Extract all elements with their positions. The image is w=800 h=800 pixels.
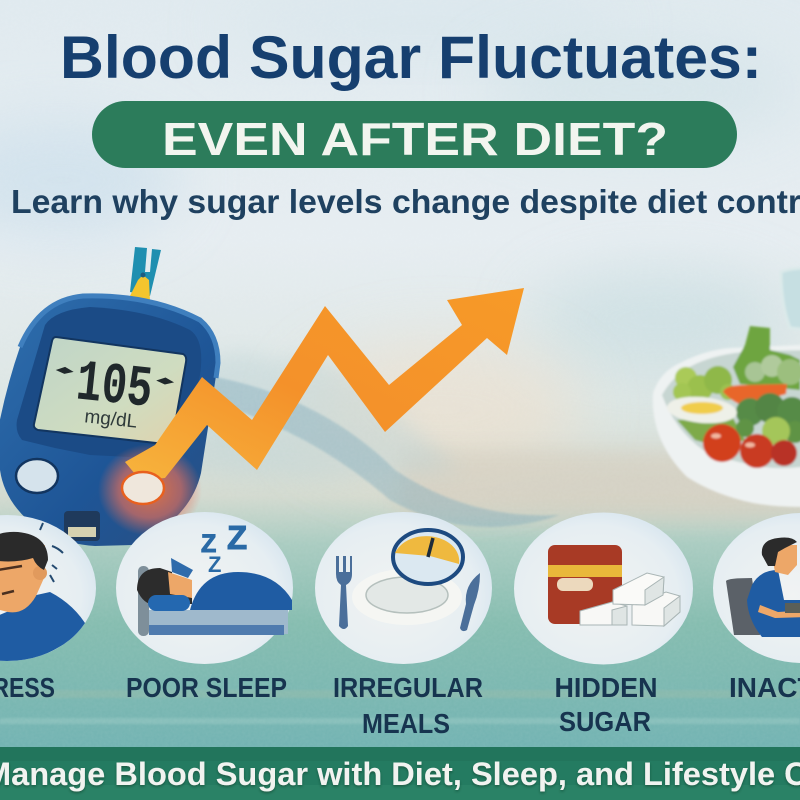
footer band bbox=[0, 747, 800, 800]
icon: plate bbox=[352, 569, 462, 625]
orange rising arrow bbox=[125, 288, 524, 480]
label: hidden sugar: HIDDEN bbox=[554, 672, 658, 703]
icon: fork bbox=[336, 556, 352, 629]
label: irregular meals: IRREGULAR bbox=[333, 672, 483, 703]
tomatoes bbox=[703, 424, 741, 462]
banner: even after diet: EVEN AFTER DIET? bbox=[162, 113, 668, 165]
egg bbox=[666, 394, 738, 426]
glucose meter bbox=[0, 247, 218, 546]
salad bowl bbox=[653, 268, 800, 508]
title: Blood Sugar Fluctuates: bbox=[60, 24, 762, 91]
banner: even after diet bbox=[92, 101, 737, 168]
bowl bbox=[653, 345, 800, 508]
reading bbox=[50, 349, 176, 436]
icon: stressed man bbox=[0, 523, 88, 665]
glow bbox=[98, 444, 202, 536]
lcd screen bbox=[34, 337, 186, 444]
factor: poor sleep bbox=[116, 512, 293, 664]
left button bbox=[16, 459, 58, 493]
bezel bbox=[17, 307, 201, 458]
factor: hidden sugar bbox=[514, 512, 693, 664]
icon: man at laptop bbox=[726, 538, 800, 637]
icon: sleeper in bed bbox=[137, 519, 292, 636]
icon: sleeper in bed: Z bbox=[227, 519, 247, 556]
right button bbox=[122, 472, 164, 504]
meter body bbox=[0, 296, 218, 546]
icon: sugar cubes bbox=[580, 573, 680, 626]
factor: inactivity bbox=[713, 513, 800, 663]
icon: red sugar box bbox=[548, 545, 622, 624]
cup bbox=[781, 268, 800, 330]
icon: sleeper in bed: Z bbox=[201, 530, 216, 558]
port bbox=[64, 511, 100, 541]
icon: knife bbox=[460, 573, 480, 631]
reading: mg/dL bbox=[84, 406, 138, 433]
test strip bbox=[129, 247, 161, 301]
icon: sleeper in bed: Z bbox=[208, 552, 221, 577]
factor: stress bbox=[0, 515, 96, 665]
label: poor sleep: POOR SLEEP bbox=[126, 672, 287, 703]
factor: irregular meals bbox=[315, 512, 492, 664]
greens bbox=[673, 326, 800, 447]
label: irregular meals: MEALS bbox=[362, 708, 450, 739]
icon: clock bbox=[393, 530, 463, 584]
subtitle: Learn why sugar levels change despite diet control bbox=[11, 183, 800, 220]
label: hidden sugar: SUGAR bbox=[559, 706, 651, 737]
reading: 105 bbox=[73, 351, 155, 424]
